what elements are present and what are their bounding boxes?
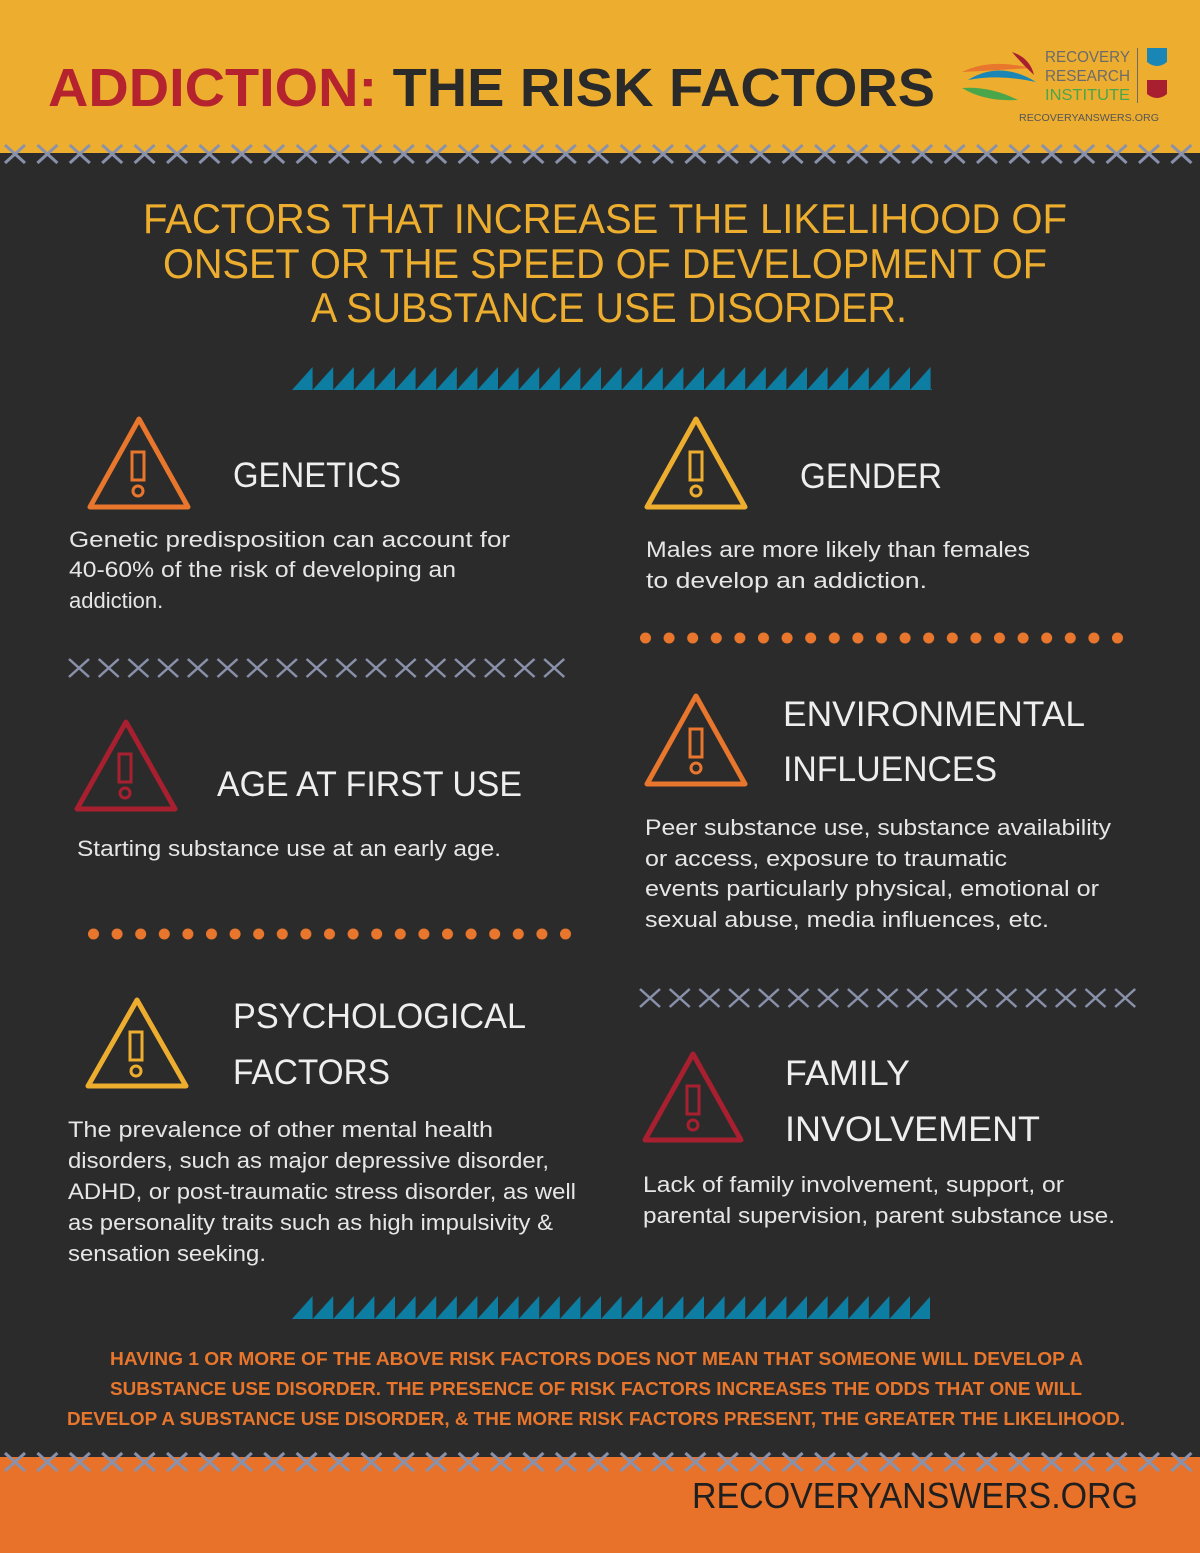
icon: warning red xyxy=(645,1054,741,1140)
bottom band xyxy=(0,1457,1200,1553)
panel: psychological factors: ADHD, or post-traumatic stress disorder, as well xyxy=(68,1179,576,1204)
panel: family involvement: INVOLVEMENT xyxy=(785,1110,1040,1149)
dot row left xyxy=(88,924,578,944)
teal sawtooth bottom xyxy=(292,1295,930,1319)
panel: environmental influences: Peer substance use, substance availability xyxy=(645,815,1111,840)
footer note: SUBSTANCE USE DISORDER. THE PRESENCE OF RISK FACTORS INCREASES THE ODDS THAT ONE WILL xyxy=(110,1379,1082,1399)
panel: environmental influences: ENVIRONMENTAL xyxy=(783,695,1085,734)
icon: warning yellow xyxy=(647,419,745,507)
panel: psychological factors: The prevalence of other mental health xyxy=(68,1117,493,1142)
bottom x row xyxy=(0,1450,1200,1474)
panel: environmental influences: events particularly physical, emotional or xyxy=(645,876,1099,901)
footer note xyxy=(67,1349,1125,1429)
panel: age at first use xyxy=(77,722,522,861)
panel: psychological factors: sensation seeking. xyxy=(68,1241,266,1266)
logo xyxy=(962,48,1167,124)
icon: warning orange xyxy=(647,696,745,784)
teal sawtooth top xyxy=(292,366,932,390)
header band xyxy=(0,0,1200,153)
panel: genetics: GENETICS xyxy=(233,456,401,495)
panel: gender: to develop an addiction. xyxy=(646,568,927,593)
subtitle: FACTORS THAT INCREASE THE LIKELIHOOD OF xyxy=(143,195,1067,242)
x row left xyxy=(65,656,570,680)
panel: psychological factors: disorders, such as major depressive disorder, xyxy=(68,1148,549,1173)
panel: family involvement: FAMILY xyxy=(785,1054,910,1093)
panel: genetics xyxy=(69,419,510,613)
title: ADDICTION: THE RISK FACTORS xyxy=(48,58,935,118)
panel: family involvement: parental supervision, parent substance use. xyxy=(643,1203,1115,1228)
dot row right xyxy=(640,628,1130,648)
logo: INSTITUTE xyxy=(1045,87,1130,104)
panel: psychological factors: PSYCHOLOGICAL xyxy=(233,997,526,1036)
footer url: RECOVERYANSWERS.ORG xyxy=(692,1475,1138,1516)
footer note: DEVELOP A SUBSTANCE USE DISORDER, & THE MORE RISK FACTORS PRESENT, THE GREATER THE LIKELIHOOD. xyxy=(67,1409,1125,1429)
panel: psychological factors: as personality traits such as high impulsivity & xyxy=(68,1210,553,1235)
panel: environmental influences: sexual abuse, media influences, etc. xyxy=(645,907,1049,932)
subtitle: A SUBSTANCE USE DISORDER. xyxy=(311,284,907,331)
subtitle xyxy=(143,195,1067,331)
panel: family involvement xyxy=(643,1054,1115,1228)
panel: environmental influences xyxy=(645,695,1111,932)
panel: psychological factors xyxy=(68,997,576,1266)
x row right xyxy=(636,986,1141,1010)
panel: gender: GENDER xyxy=(800,457,942,496)
panel: age at first use: AGE AT FIRST USE xyxy=(217,765,522,804)
footer note: HAVING 1 OR MORE OF THE ABOVE RISK FACTORS DOES NOT MEAN THAT SOMEONE WILL DEVELOP A xyxy=(110,1349,1083,1369)
logo: RESEARCH xyxy=(1045,68,1130,85)
panel: family involvement: Lack of family involvement, support, or xyxy=(643,1172,1064,1197)
subtitle: ONSET OR THE SPEED OF DEVELOPMENT OF xyxy=(163,240,1047,287)
top x row xyxy=(0,142,1200,166)
icon: warning red xyxy=(77,722,175,809)
panel: genetics: addiction. xyxy=(69,588,163,613)
panel: age at first use: Starting substance use at an early age. xyxy=(77,836,501,861)
panel: environmental influences: INFLUENCES xyxy=(783,750,997,789)
icon: warning orange xyxy=(90,419,188,507)
logo: RECOVERYANSWERS.ORG xyxy=(1019,113,1159,124)
icon: warning yellow xyxy=(88,1000,186,1086)
panel: environmental influences: or access, exposure to traumatic xyxy=(645,846,1007,871)
logo: RECOVERY xyxy=(1045,49,1130,66)
panel: psychological factors: FACTORS xyxy=(233,1053,390,1092)
panel: genetics: Genetic predisposition can account for xyxy=(69,527,510,552)
panel: gender: Males are more likely than females xyxy=(646,537,1030,562)
panel: gender xyxy=(646,419,1030,593)
panel: genetics: 40-60% of the risk of developing an xyxy=(69,557,456,582)
